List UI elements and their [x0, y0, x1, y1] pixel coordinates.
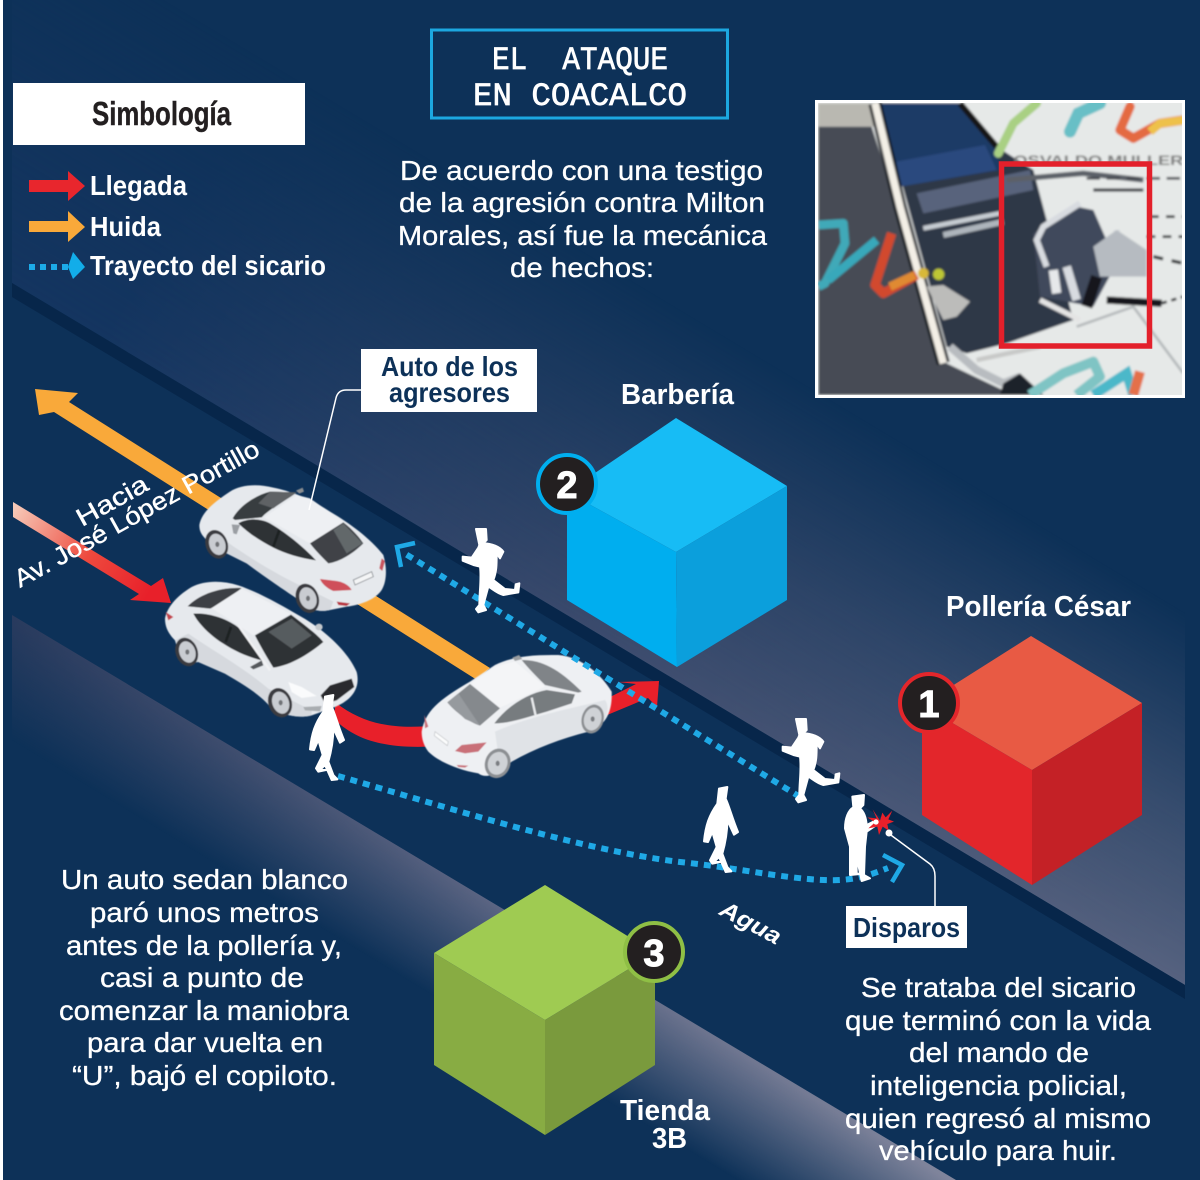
- callout: Auto de los agresores: Auto de los: [381, 351, 518, 382]
- intro text: De acuerdo con una testigo: [400, 155, 763, 186]
- red highlight frame: [1002, 164, 1150, 346]
- red arrow: arrival route: [13, 502, 659, 747]
- label: Tienda 3B: 3B: [652, 1123, 687, 1155]
- legend: [29, 170, 326, 281]
- car: agressors' car parked: [199, 485, 386, 616]
- text: right description: vehículo para huir.: [879, 1135, 1117, 1166]
- label: Tienda 3B: [620, 1095, 711, 1155]
- text: right description: que terminó con la vida: [845, 1005, 1151, 1036]
- walker on route: [704, 787, 738, 872]
- callout: Auto de los agresores: [309, 349, 537, 510]
- green cube: Tienda 3B: [434, 885, 655, 1135]
- squiggles: [998, 103, 1037, 153]
- shooter figure with muzzle flash: [845, 795, 894, 881]
- marker 2: [538, 455, 596, 513]
- callout: Disparos: Disparos: [853, 912, 960, 943]
- marker 2: 2: [556, 465, 578, 507]
- orange arrow: escape route: [35, 389, 490, 680]
- road label: Hacia Av. José López Portillo: Av. José López Portillo: [9, 435, 264, 593]
- text: left description: Un auto sedan blanco: [61, 864, 348, 895]
- blue cube: Barbería: [567, 418, 787, 667]
- text: left description: para dar vuelta en: [87, 1027, 323, 1058]
- legend item: Huida: [29, 211, 161, 242]
- title: EN COACALCO: [473, 78, 687, 115]
- legend item: Llegada: Llegada: [90, 170, 187, 201]
- text: right description: [845, 972, 1151, 1166]
- intro text: Morales, así fue la mecánica: [398, 220, 767, 251]
- legend title: Simbología: [13, 83, 305, 145]
- road label: Agua: Agua: [715, 895, 786, 950]
- text: left description: comenzar la maniobra: [59, 995, 349, 1026]
- upper curb: [12, 283, 1185, 999]
- marker 1: [900, 674, 958, 732]
- intro text: [398, 155, 767, 283]
- text: right description: inteligencia policial,: [870, 1070, 1127, 1101]
- title: [432, 30, 728, 118]
- upper sidewalk: [40, 257, 1185, 985]
- text: left description: casi a punto de: [100, 962, 304, 993]
- sicario figure in camera image: [1033, 178, 1183, 373]
- runner near Barbería: [463, 529, 519, 612]
- road label: Hacia Av. José López Portillo: Hacia: [71, 470, 153, 532]
- runner near pollería: [783, 719, 839, 802]
- intro text: de la agresión contra Milton: [399, 187, 765, 218]
- dotted route: sicario returns to car: [397, 543, 800, 797]
- label: Barbería: Barbería: [621, 379, 735, 411]
- car: making U-turn: [422, 655, 612, 782]
- text: right description: Se trataba del sicario: [861, 972, 1136, 1003]
- legend item: Trayecto del sicario: Trayecto del sicario: [90, 250, 326, 281]
- label: Pollería César: Pollería César: [946, 591, 1131, 623]
- legend title: Simbología: Simbología: [92, 95, 232, 132]
- text: left description: “U”, bajó el copiloto.: [72, 1060, 337, 1091]
- marker 1: 1: [918, 684, 940, 726]
- photo: security camera still: OSVALDO MULLER: [1013, 152, 1183, 168]
- car: arrival position: [165, 582, 358, 721]
- label: Tienda 3B: Tienda: [620, 1095, 711, 1127]
- title: EL ATAQUE: [492, 42, 668, 79]
- dotted route: sicario walks to target: [338, 776, 902, 882]
- legend item: Huida: Huida: [90, 211, 161, 242]
- intro text: de hechos:: [510, 252, 654, 283]
- copilot figure: [310, 695, 344, 780]
- photo: security camera still: [813, 100, 1190, 400]
- text: left description: paró unos metros: [90, 897, 319, 928]
- text: left description: [59, 864, 349, 1091]
- callout: Auto de los agresores: agresores: [389, 377, 510, 408]
- text: right description: del mando de: [909, 1037, 1089, 1068]
- legend item: Llegada: [29, 170, 187, 201]
- marker 3: [625, 923, 683, 981]
- callout: Disparos: [846, 830, 967, 948]
- text: right description: quien regresó al mismo: [845, 1103, 1151, 1134]
- marker 3: 3: [643, 933, 665, 975]
- lower sidewalk: [12, 615, 956, 1180]
- text: left description: antes de la pollería y,: [66, 930, 342, 961]
- red cube: Pollería César: [922, 636, 1142, 885]
